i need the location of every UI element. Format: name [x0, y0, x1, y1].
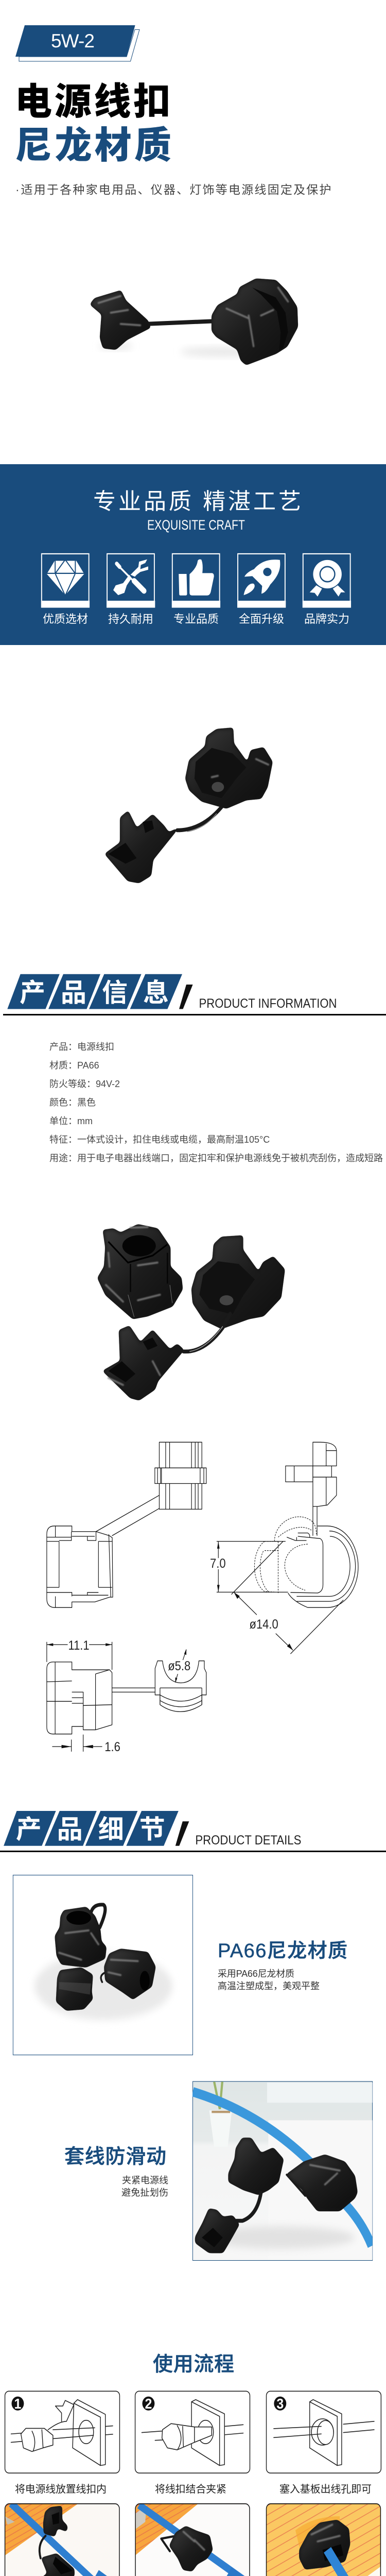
- step 2 photo: [135, 2503, 250, 2576]
- banner: exquisite craft: [0, 464, 386, 645]
- icon: thumbs up: [172, 554, 220, 608]
- product photo: clip with strap: [91, 279, 297, 364]
- icon: tools: [107, 554, 155, 608]
- banner heading: 专业品质 精湛工艺: [93, 489, 301, 514]
- drawing: front view: [47, 1661, 206, 1734]
- application description: ·: [15, 183, 20, 196]
- product specification list: 颜色：黑色: [49, 1097, 96, 1108]
- product specification list: [49, 1042, 383, 1163]
- model badge: 5W-2: [51, 30, 95, 52]
- detail text: PA66 material: [218, 1940, 347, 1991]
- icon labels: 专业品质: [173, 613, 219, 625]
- step 3 diagram: 3: [276, 2395, 284, 2412]
- dimension lines and arrows: 11.1: [68, 1638, 90, 1652]
- step captions: 塞入基板出线孔即可: [279, 2483, 372, 2495]
- header tabs: 品: [57, 1815, 83, 1844]
- header tabs: 品: [61, 978, 86, 1007]
- model badge: [15, 25, 139, 61]
- step 1 photo: [5, 2503, 119, 2576]
- icon labels: 持久耐用: [108, 613, 153, 625]
- dimension lines and arrows: ø14.0: [250, 1617, 278, 1631]
- header tabs: [7, 974, 193, 1009]
- header tabs: 信: [102, 978, 128, 1007]
- step captions: [15, 2483, 372, 2495]
- product specification list: 特征：一体式设计，扣住电线或电缆，最高耐温105°C: [49, 1134, 270, 1145]
- dimension lines and arrows: 1.6: [104, 1740, 120, 1754]
- dimension lines and arrows: ø5.8: [168, 1659, 190, 1673]
- step captions: 将线扣结合夹紧: [155, 2483, 226, 2495]
- dimension lines and arrows: [47, 1541, 343, 1754]
- icon: rocket: [237, 554, 286, 608]
- icon labels: 品牌实力: [304, 613, 349, 625]
- header tabs: [4, 1811, 189, 1846]
- icon: diamond: [41, 554, 90, 608]
- icon labels: [43, 613, 349, 625]
- icon labels: 优质选材: [43, 613, 88, 625]
- header tabs: 产: [20, 978, 45, 1007]
- detail text: anti-slip: [64, 2146, 168, 2198]
- header tabs: 息: [143, 978, 169, 1007]
- icon: award ribbon: [303, 554, 351, 608]
- banner subheading: EXQUISITE CRAFT: [147, 517, 245, 533]
- section header: product information: [3, 974, 386, 1015]
- drawing: side view: [286, 1442, 358, 1607]
- product photo: grommet and open clip: [98, 1225, 284, 1328]
- step 2 diagram: 2: [145, 2395, 152, 2412]
- step 2 diagram: [135, 2391, 250, 2473]
- icon labels: 全面升级: [239, 613, 284, 625]
- product specification list: 防火等级：94V-2: [49, 1079, 120, 1089]
- detail text: anti-slip: 套线防滑动: [64, 2146, 166, 2168]
- product specification list: 单位：mm: [49, 1116, 93, 1126]
- product photo: lower half of open clip: [103, 1314, 230, 1400]
- drawing: top view: [47, 1442, 206, 1607]
- step 1 diagram: 1: [14, 2395, 22, 2412]
- product specification list: 产品：电源线扣: [49, 1042, 114, 1052]
- detail text: PA66 material: PA66尼龙材质: [218, 1940, 347, 1962]
- step 3 diagram: [267, 2391, 381, 2473]
- detail text: anti-slip: 避免扯划伤: [121, 2188, 168, 2198]
- step 1 diagram: [5, 2391, 119, 2473]
- header English caption: PRODUCT DETAILS: [195, 1833, 301, 1848]
- usage heading: 使用流程: [153, 2353, 234, 2376]
- header tabs: 细: [98, 1815, 124, 1844]
- header tabs: 产: [16, 1815, 42, 1844]
- step captions: 将电源线放置线扣内: [15, 2483, 107, 2495]
- product specification list: 材质：PA66: [49, 1060, 99, 1071]
- dimension lines and arrows: 7.0: [210, 1556, 226, 1571]
- detail panel: cable photo: [193, 2081, 373, 2261]
- title line 1: 电源线扣: [15, 81, 170, 123]
- section header: product details: [0, 1811, 386, 1852]
- product specification list: 用途：用于电子电器出线端口，固定扣牢和保护电源线免于被机壳刮伤，造成短路: [49, 1153, 383, 1163]
- product photo: opened clip: [106, 728, 272, 883]
- header English caption: PRODUCT INFORMATION: [199, 996, 337, 1011]
- header tabs: 节: [139, 1815, 165, 1844]
- title line 2: 尼龙材质: [15, 125, 171, 166]
- application description: 适用于各种家电用品、仪器、灯饰等电源线固定及保护: [21, 183, 331, 196]
- detail text: PA66 material: 采用PA66尼龙材质: [218, 1969, 294, 1979]
- detail text: anti-slip: 夹紧电源线: [122, 2175, 168, 2185]
- dimension drawing: [47, 1442, 358, 1754]
- step 3 photo: [266, 2503, 380, 2576]
- detail text: PA66 material: 高温注塑成型，美观平整: [218, 1981, 320, 1991]
- detail panel: grommet photo: [13, 1875, 193, 2055]
- drawing: hidden lines: [254, 1517, 317, 1593]
